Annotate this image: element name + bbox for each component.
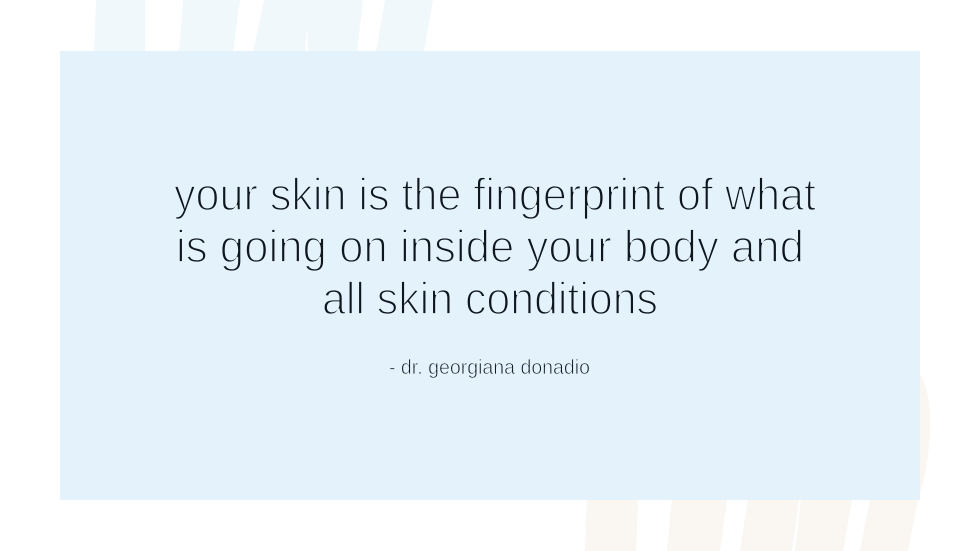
quote text: all skin conditions bbox=[322, 273, 658, 324]
decorative brush stripes: bottom right bbox=[585, 372, 930, 551]
decorative brush stripes: top left bbox=[94, 0, 433, 52]
quote panel bbox=[60, 51, 920, 500]
quote text: your skin is the fingerprint of what bbox=[174, 169, 816, 220]
quote text bbox=[174, 169, 816, 324]
attribution: - dr. georgiana donadio bbox=[389, 357, 590, 379]
quote text: is going on inside your body and bbox=[176, 221, 804, 272]
